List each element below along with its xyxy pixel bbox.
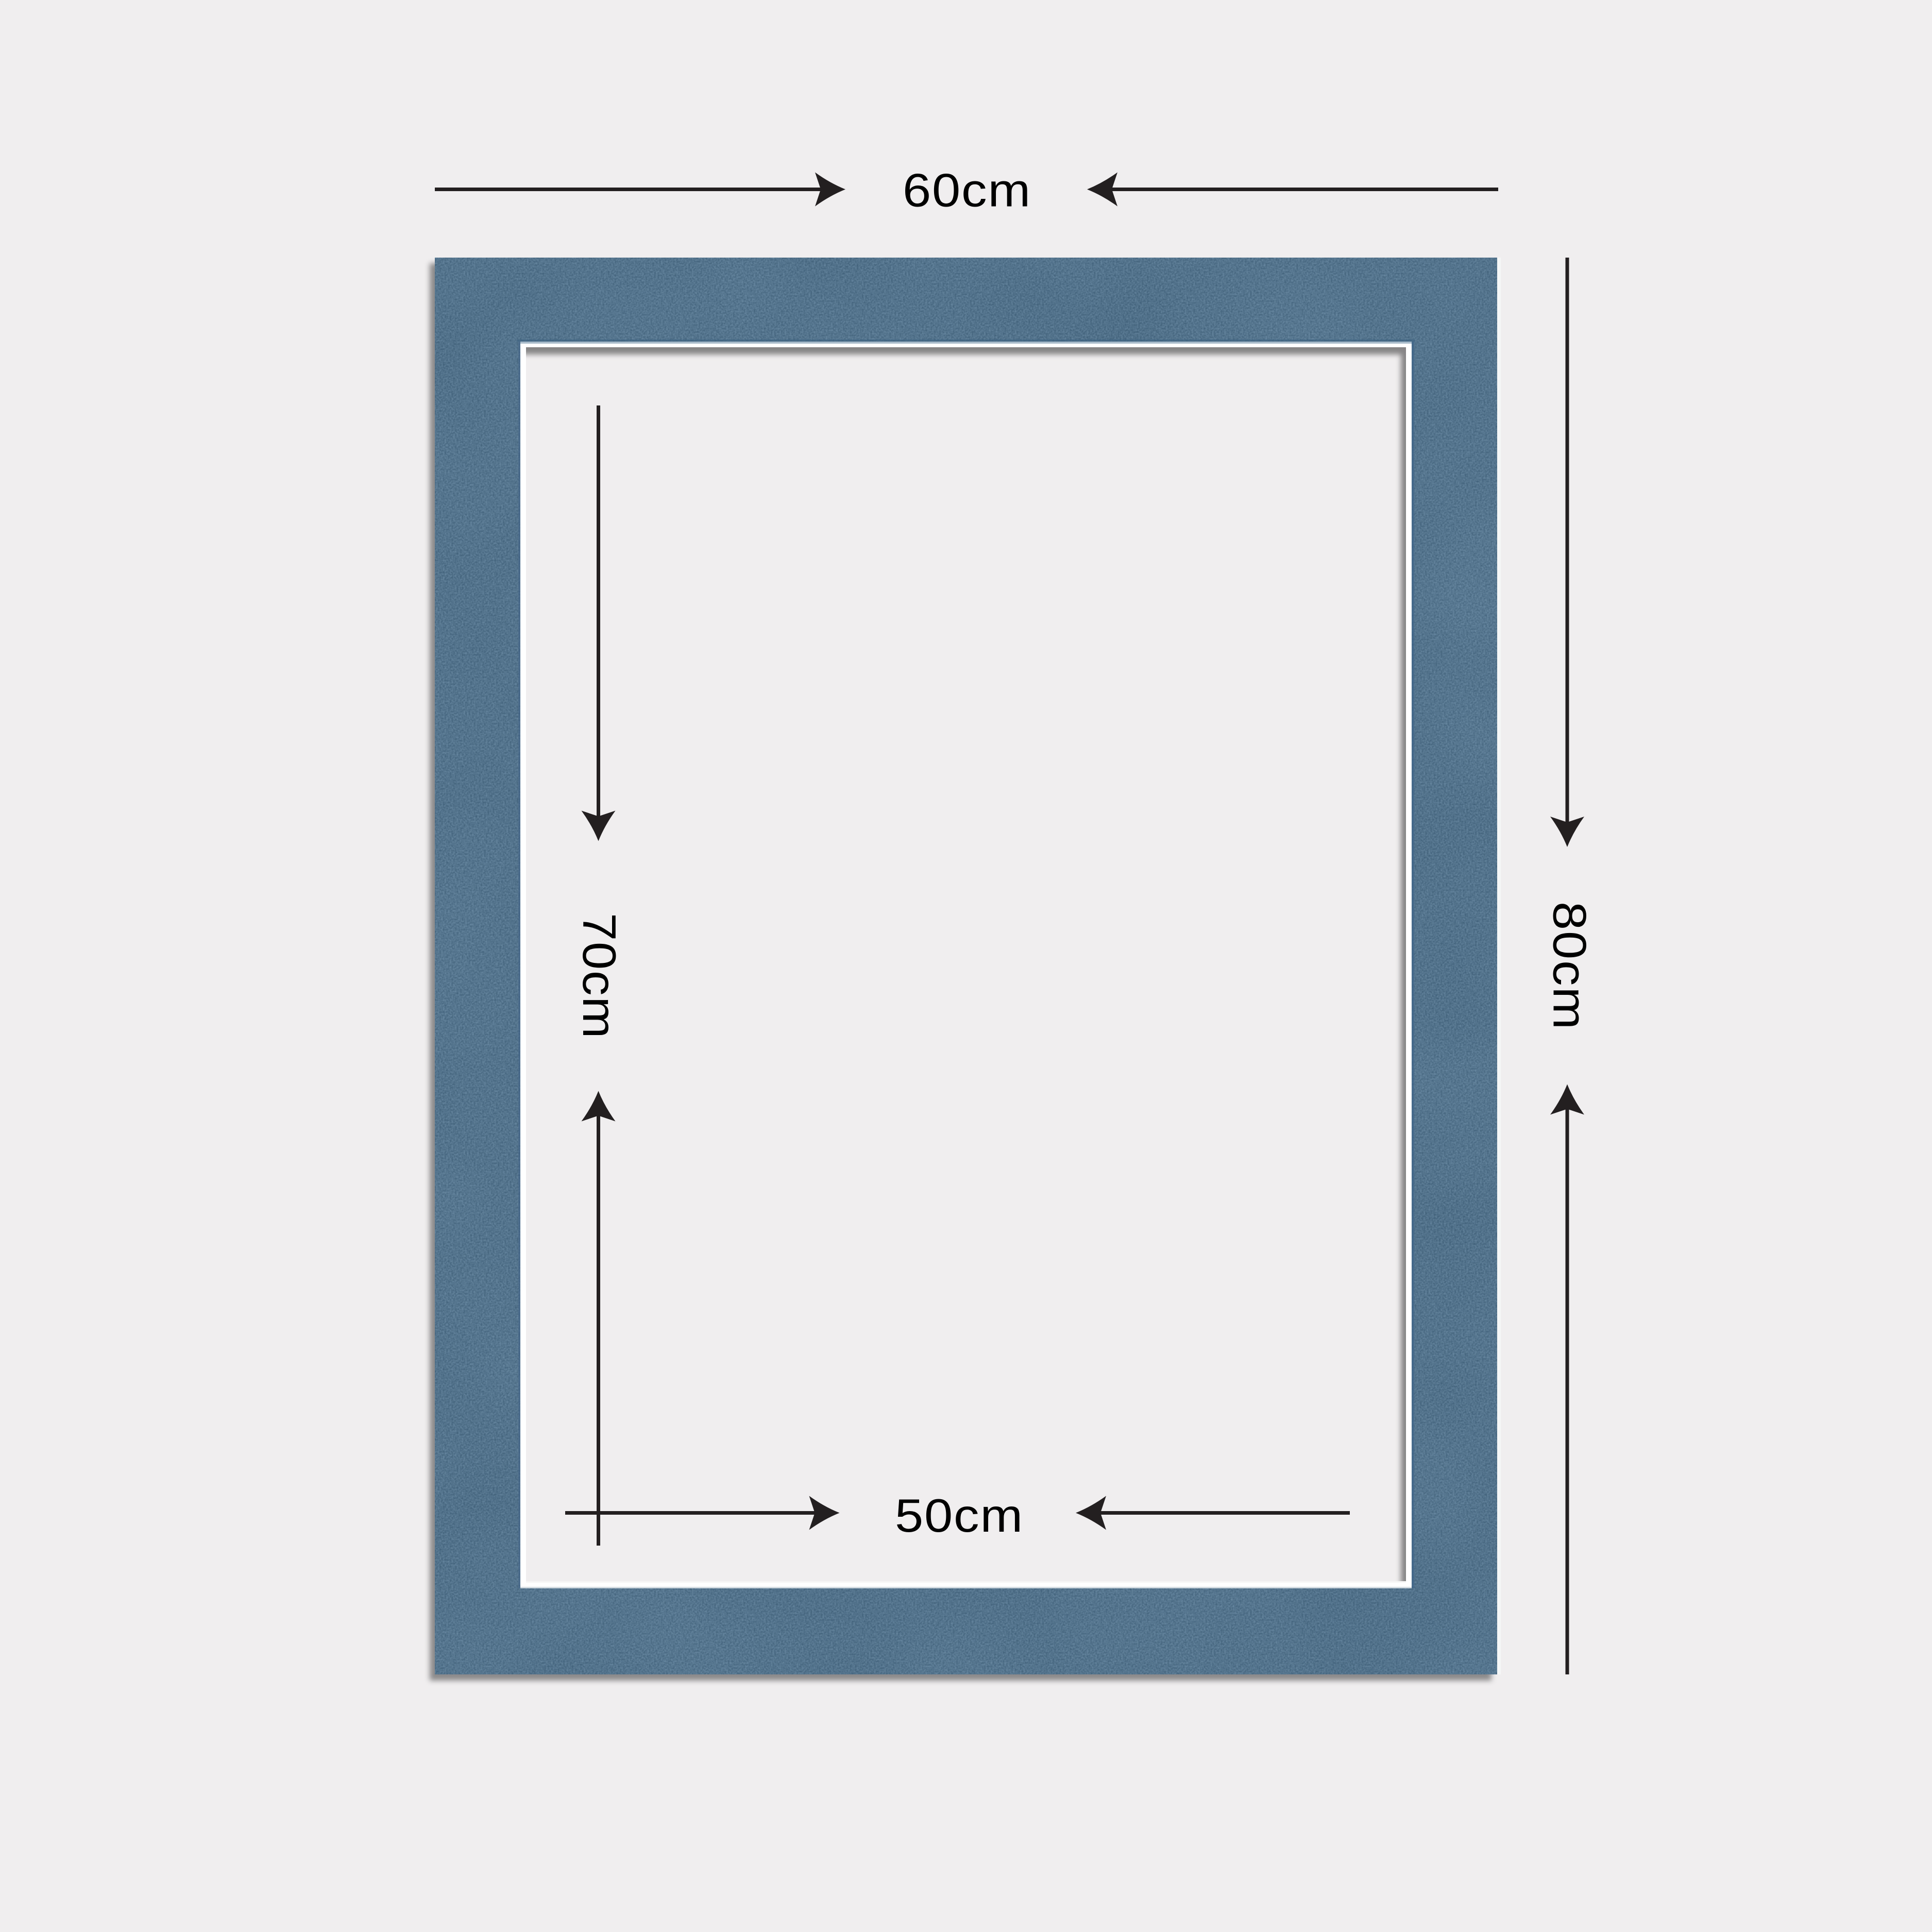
- arrow: inner width, left half: [565, 1496, 840, 1530]
- arrow: inner height, lower half: [581, 1091, 615, 1546]
- right edge glow: [1497, 258, 1501, 1674]
- arrow: top width, left half: [435, 172, 845, 206]
- panel: blue picture mat with window: [430, 258, 1501, 1681]
- white bevel of the window: [517, 340, 1415, 1588]
- label: outer width 60cm: 60cm: [903, 164, 1031, 217]
- label: outer height 80cm: 80cm: [1543, 902, 1596, 1030]
- arrow: outer height, lower half: [1550, 1084, 1584, 1674]
- label: inner height 70cm: 70cm: [573, 913, 625, 1039]
- label: inner width 50cm: 50cm: [895, 1490, 1024, 1542]
- outer drop shadow: [430, 263, 1492, 1681]
- arrow: inner width, right half: [1076, 1496, 1350, 1530]
- arrow: outer height, upper half: [1550, 258, 1584, 847]
- inner shadow cast by the mat: [526, 347, 1406, 1581]
- mat board: [435, 258, 1497, 1674]
- arrow: inner height, upper half: [581, 405, 615, 841]
- arrow: top width, right half: [1087, 172, 1498, 206]
